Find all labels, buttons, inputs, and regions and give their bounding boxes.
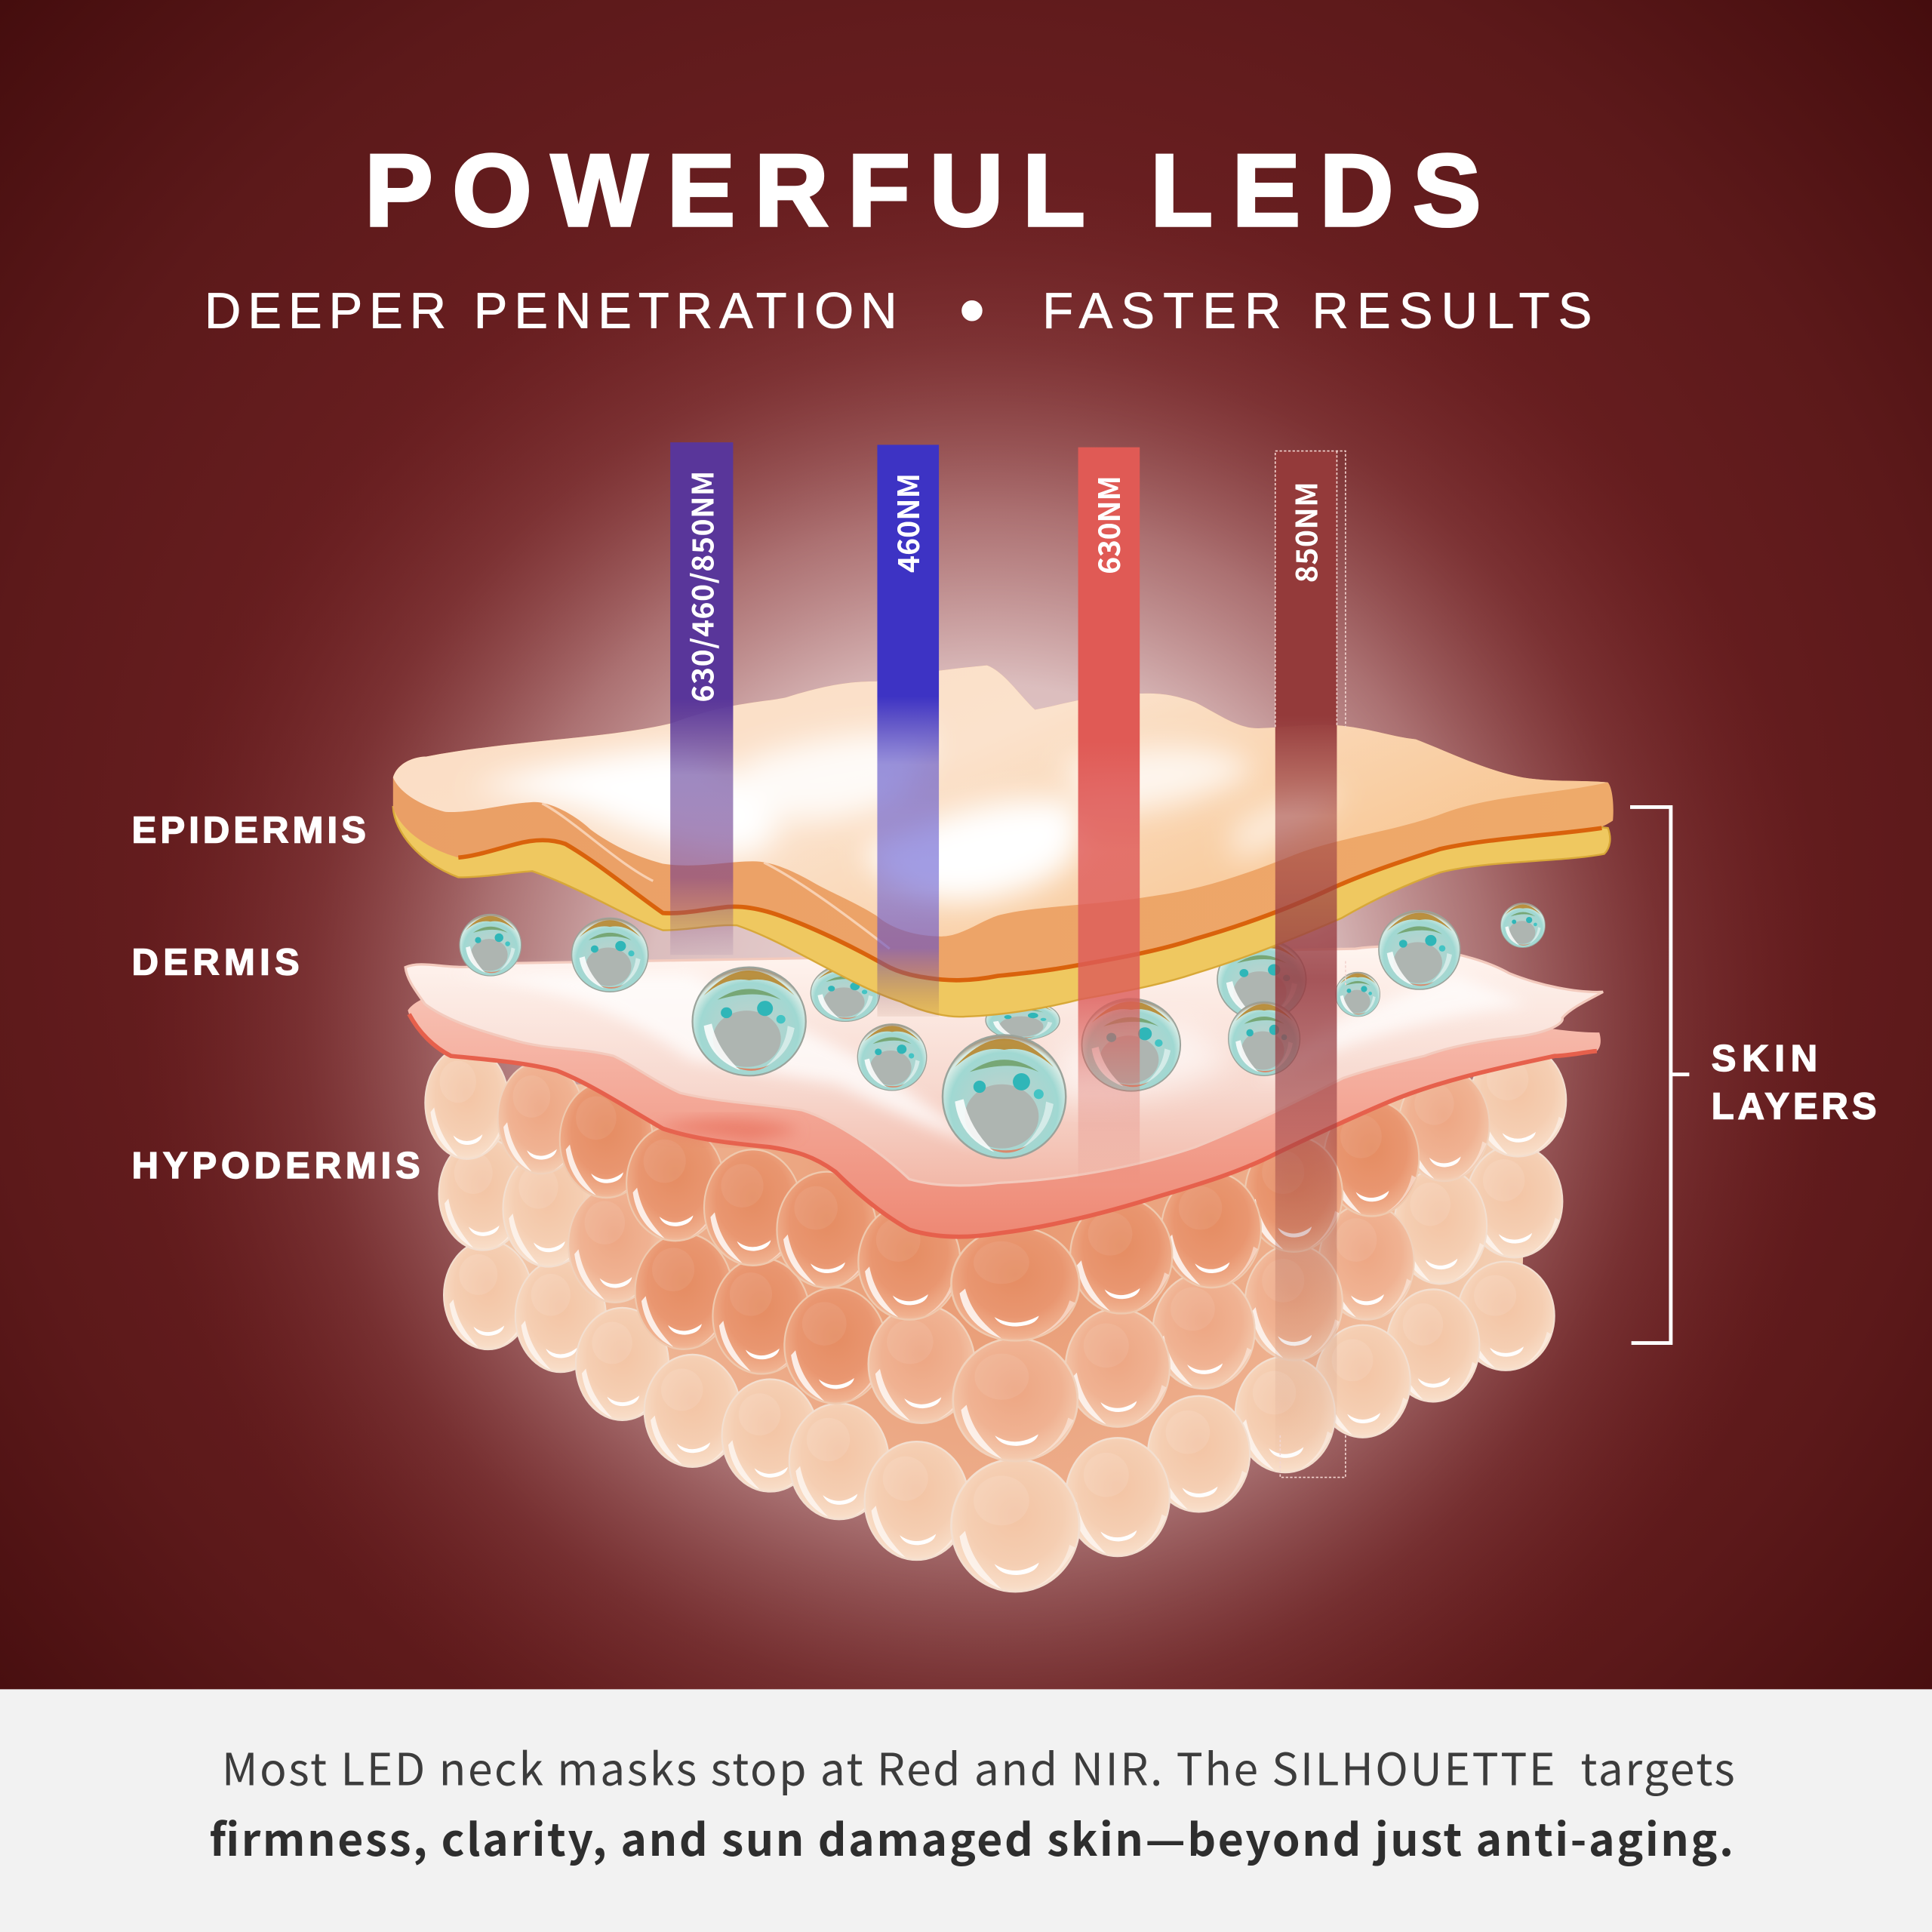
water bubbles: [460, 903, 1545, 1158]
label: skin layers: LAYERS: [1712, 1086, 1877, 1127]
footer panel: [0, 1689, 1932, 1932]
subtitle: FASTER RESULTS: [1042, 282, 1592, 339]
amber seam: [458, 828, 1601, 980]
cell mass underlay: [481, 1084, 1527, 1552]
label: hypodermis: HYPODERMIS: [132, 1146, 420, 1186]
LED bars: [670, 442, 1346, 1478]
bar: 460nm: [877, 445, 939, 1017]
epidermis layer: [393, 666, 1614, 1017]
bar: 850nm: [1275, 451, 1346, 1478]
bar: 850nm: 850NM: [1284, 481, 1326, 583]
row 2: [438, 1138, 1562, 1461]
surface highlights: [468, 732, 1343, 902]
ridge lines: [542, 803, 890, 949]
dermis sheets: [405, 946, 1603, 1237]
subtitle: •: [958, 268, 986, 353]
footer line 1: Most LED neck masks stop at Red and NIR. The SILHOUETTE targets: [222, 1734, 1735, 1798]
row 1: [425, 1044, 1566, 1340]
bar: 630nm: 630NM: [1087, 475, 1129, 574]
peach top face: [393, 666, 1608, 937]
label: skin layers: [1712, 1038, 1877, 1127]
bar: 630nm: [1078, 448, 1140, 1183]
subtitle: DEEPER PENETRATION: [205, 282, 897, 339]
bar: 630/460/850nm: 630/460/850NM: [680, 471, 722, 703]
hypodermis fat cells: [425, 1044, 1566, 1592]
label: epidermis: EPIDERMIS: [132, 811, 366, 851]
lower salmon sheet: [408, 990, 1601, 1237]
footer line 2: firmness, clarity, and sun damaged skin—beyond just anti-aging.: [210, 1804, 1734, 1869]
skin layers bracket: [1630, 807, 1689, 1343]
label: skin layers: SKIN: [1712, 1038, 1817, 1079]
bar: 630/460/850nm: [670, 442, 733, 955]
bar: 460nm: 460NM: [886, 473, 928, 573]
label: dermis: DERMIS: [132, 942, 300, 983]
title: POWERFUL LEDS: [365, 133, 1481, 248]
upper pale sheet: [405, 946, 1603, 1186]
subtitle: [205, 268, 1592, 353]
row 3: [444, 1241, 1555, 1592]
yellow under-layer: [393, 807, 1610, 1017]
orange front face: [393, 666, 1614, 980]
